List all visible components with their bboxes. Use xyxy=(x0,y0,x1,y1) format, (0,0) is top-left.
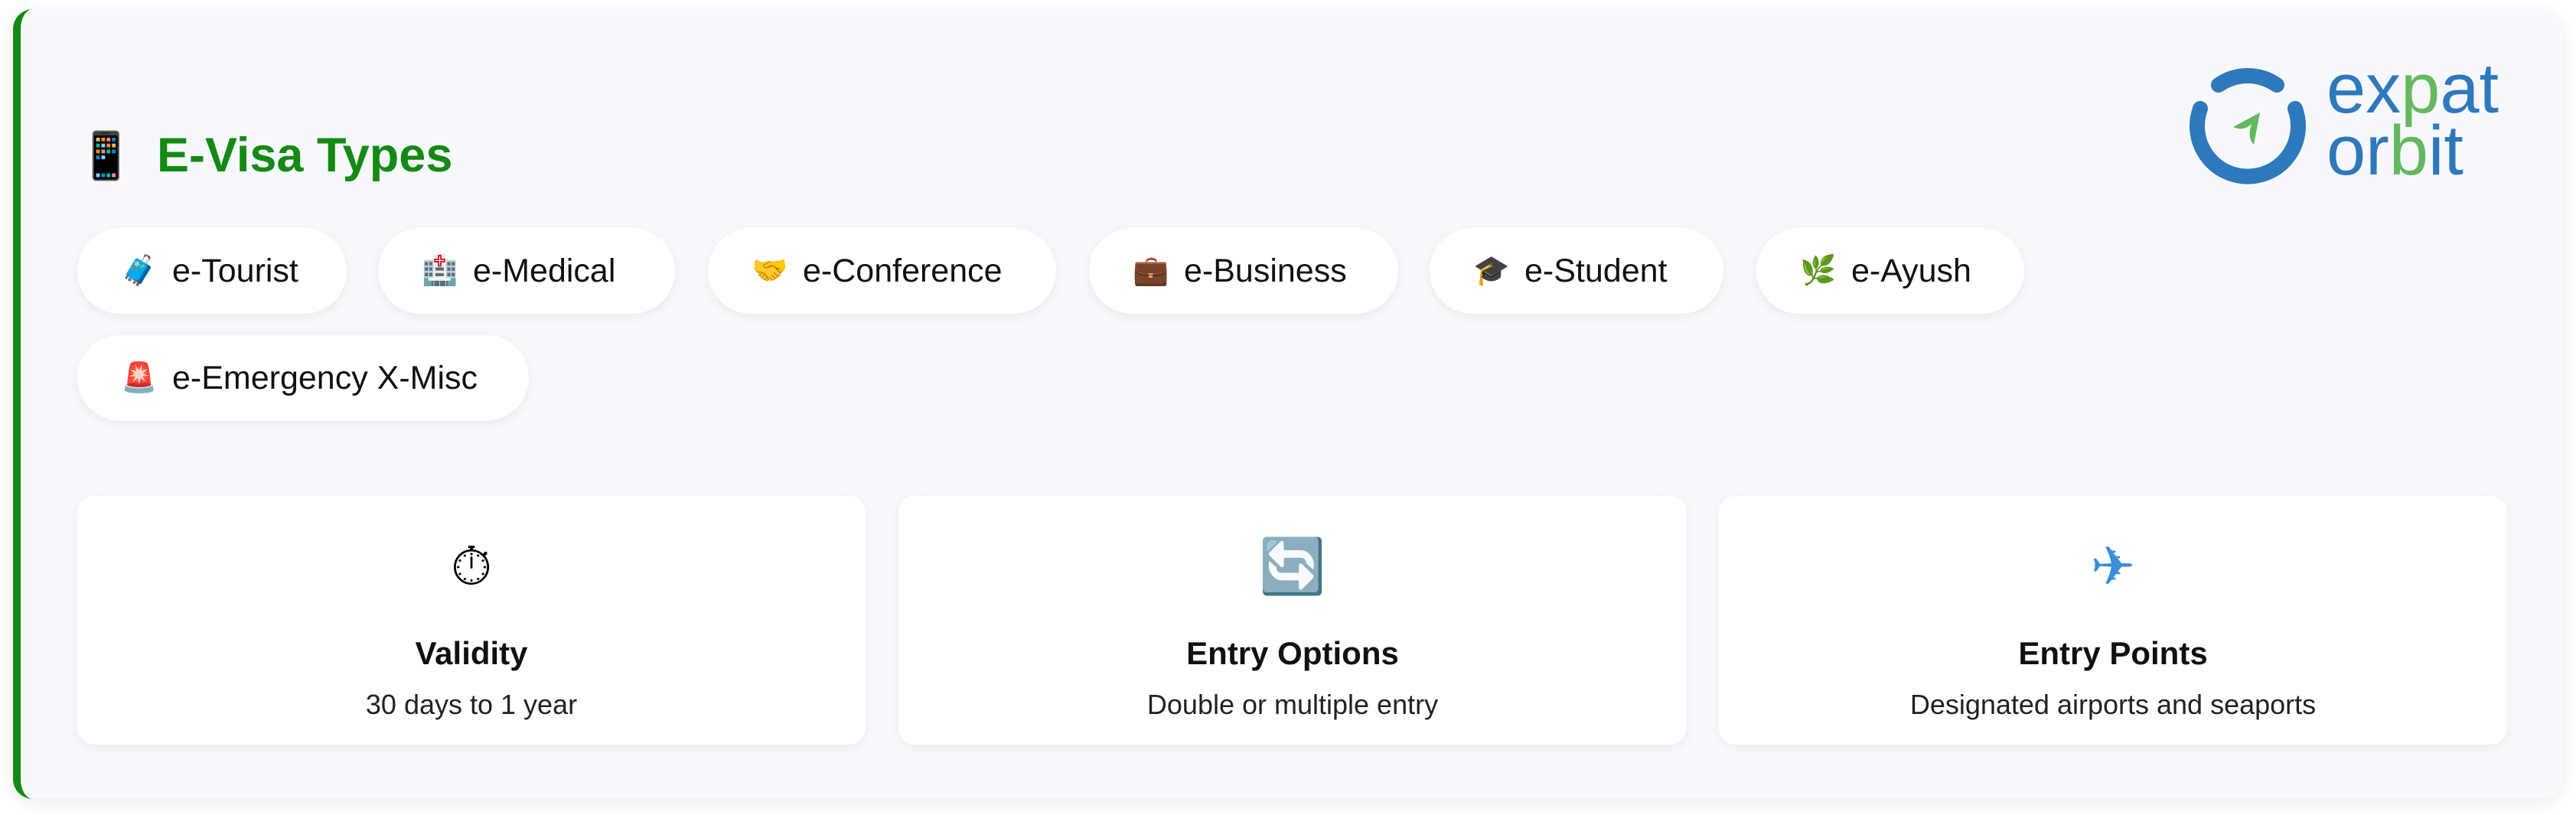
panel: entry points: ✈ xyxy=(2091,536,2135,596)
pill: e-Conference: 🤝 xyxy=(752,255,788,287)
pill: e-Business xyxy=(1089,228,1398,314)
panel: entry options: 🔄 xyxy=(1259,536,1326,596)
panel: entry points: Entry Points xyxy=(2018,635,2208,671)
panel: validity: Validity xyxy=(415,635,528,671)
pill: e-Business: e-Business xyxy=(1184,253,1347,289)
title: E-Visa Types xyxy=(157,129,452,182)
pill: e-Ayush: 🌿 xyxy=(1800,255,1837,287)
pill: e-Ayush: e-Ayush xyxy=(1851,253,1971,289)
pill: e-Conference xyxy=(708,228,1056,314)
panel: validity: ⏱ xyxy=(451,536,492,596)
pill: e-Emergency X-Misc: e-Emergency X-Misc xyxy=(172,360,478,396)
pill: e-Ayush xyxy=(1756,228,2024,314)
panel: validity: 30 days to 1 year xyxy=(366,689,577,720)
pill: e-Tourist: e-Tourist xyxy=(172,253,298,289)
pill: e-Emergency X-Misc xyxy=(77,335,529,421)
logo: expat orbit: expat xyxy=(2327,50,2499,128)
pill: e-Tourist: 🧳 xyxy=(121,255,158,287)
pill: e-Medical xyxy=(378,228,675,314)
pill: e-Student: e-Student xyxy=(1524,253,1667,289)
panel: entry points xyxy=(1719,496,2507,745)
panel: entry options: Entry Options xyxy=(1186,635,1399,671)
panel: validity xyxy=(77,496,866,745)
pill: e-Student xyxy=(1430,228,1723,314)
pill: e-Conference: e-Conference xyxy=(803,253,1003,289)
panel: entry options xyxy=(898,496,1687,745)
panel: entry options: Double or multiple entry xyxy=(1147,689,1438,720)
pill: e-Business: 💼 xyxy=(1133,255,1169,287)
pill: e-Medical: 🏥 xyxy=(422,255,458,287)
pill: e-Medical: e-Medical xyxy=(473,253,615,289)
panel: entry points: Designated airports and seaports xyxy=(1910,689,2316,720)
pill: e-Tourist xyxy=(77,228,347,314)
title: 📱 xyxy=(77,130,135,181)
logo: expat orbit: orbit xyxy=(2327,112,2464,190)
pill: e-Student: 🎓 xyxy=(1473,255,1510,287)
pill: e-Emergency X-Misc: 🚨 xyxy=(121,362,158,394)
